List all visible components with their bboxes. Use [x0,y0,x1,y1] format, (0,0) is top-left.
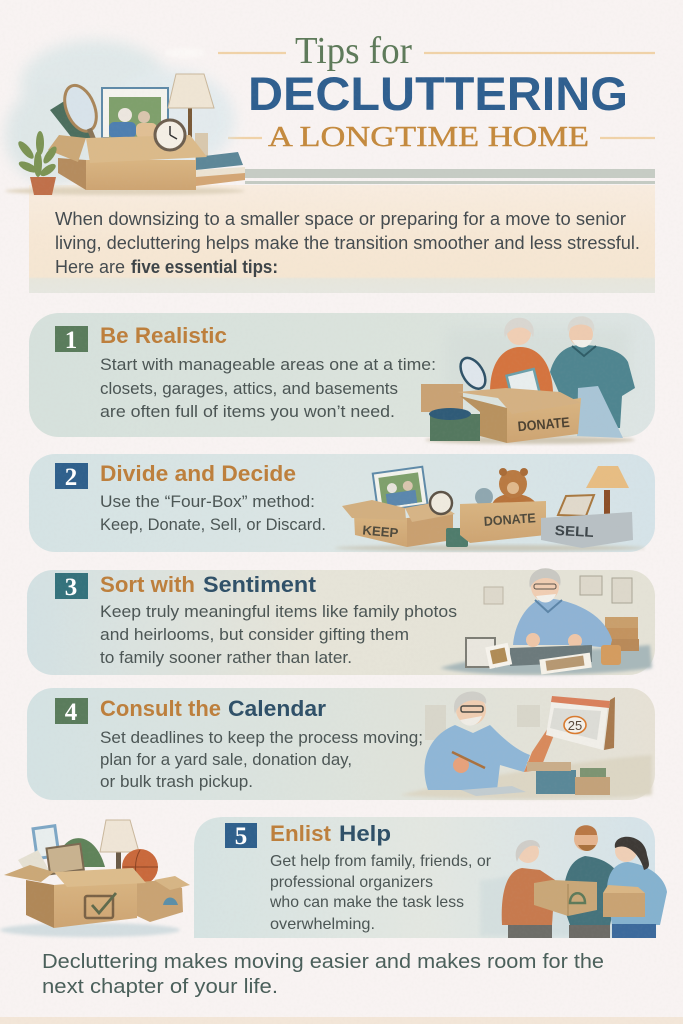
illustration: man sorting photos [440,568,652,675]
intro text: When downsizing to a smaller space or preparing for a move to senior [55,209,626,229]
body 5: who can make the task less [269,894,464,911]
panel: tip 1 be realistic [29,313,655,444]
body 1 [100,355,436,421]
body 4: Set deadlines to keep the process moving; [100,728,423,747]
intro text: five essential tips: [131,257,278,277]
body 5: overwhelming. [270,916,375,933]
title line: decluttering: DECLUTTERING [248,67,628,120]
illustration: keep donate sell boxes [335,466,645,551]
heading 5 [270,821,391,846]
body 1: closets, garages, attics, and basements [100,379,398,398]
intro text: living, decluttering helps make the transition smoother and less stressful. [55,233,640,253]
badge 5: 5 [235,823,247,850]
badge 3: 3 [65,574,77,601]
panel: tip 5 enlist help [194,817,667,938]
badge 1: 1 [65,327,77,354]
intro text [55,209,640,277]
badge 4: 4 [65,699,78,726]
panel: tip 4 consult the calendar [27,688,655,800]
intro text: Here are [55,257,125,277]
body 3 [100,602,457,667]
badge 2 [55,463,88,491]
badge 3 [55,573,88,601]
illustration: box with check mark [0,820,190,937]
body 1: Start with manageable areas one at a time: [100,355,436,374]
body 3: to family sooner rather than later. [100,648,352,667]
illustration: couple packing donate box [421,316,635,444]
header illustration: box of keepsakes [5,40,245,195]
closing message: Decluttering makes moving easier and makes room for the [42,951,604,973]
panel: tip 3 sort with sentiment [27,568,655,675]
closing message [42,951,604,998]
body 5: Get help from family, friends, or [270,853,492,870]
body 5 [269,853,492,933]
heading 3 [100,572,317,597]
body 4: or bulk trash pickup. [100,772,253,791]
body 3: Keep truly meaningful items like family photos [100,602,457,621]
title line: a longtime home: A LONGTIME HOME [268,121,589,153]
illustration: man pointing at calendar [400,692,652,799]
body 4: plan for a yard sale, donation day, [100,750,352,769]
title [218,30,655,153]
badge 2: 2 [65,464,77,491]
intro panel [29,185,655,293]
badge 5 [225,823,257,850]
closing message: next chapter of your life. [42,976,278,998]
illustration: family carrying boxes [480,825,667,938]
illustration: couple packing donate box: DONATE [517,414,570,434]
heading 5: Help [339,821,391,846]
body 2: Use the “Four-Box” method: [100,492,315,511]
illustration: keep donate sell boxes: KEEP [362,522,399,541]
body 4 [100,728,423,791]
badge 1 [55,326,88,354]
heading 2: Divide and Decide [100,461,296,486]
heading 3: Sort with [100,572,195,597]
panel: tip 2 divide and decide [29,454,655,552]
illustration: keep donate sell boxes: DONATE [483,510,536,529]
body 5: professional organizers [270,874,433,891]
body 2 [100,492,326,534]
body 2: Keep, Donate, Sell, or Discard. [100,515,326,534]
heading 4: Calendar [228,696,326,721]
heading 4 [100,696,326,721]
heading 3: Sentiment [203,572,317,597]
badge 4 [55,698,88,726]
heading 4: Consult the [100,696,221,721]
body 1: are often full of items you won’t need. [100,402,395,421]
body 3: and heirlooms, but consider gifting them [100,625,409,644]
illustration: man pointing at calendar: 25 [568,718,582,733]
illustration: keep donate sell boxes: SELL [554,522,595,540]
heading 1: Be Realistic [100,323,227,348]
title line: tips for: Tips for [295,30,412,72]
heading 5: Enlist [270,821,332,846]
